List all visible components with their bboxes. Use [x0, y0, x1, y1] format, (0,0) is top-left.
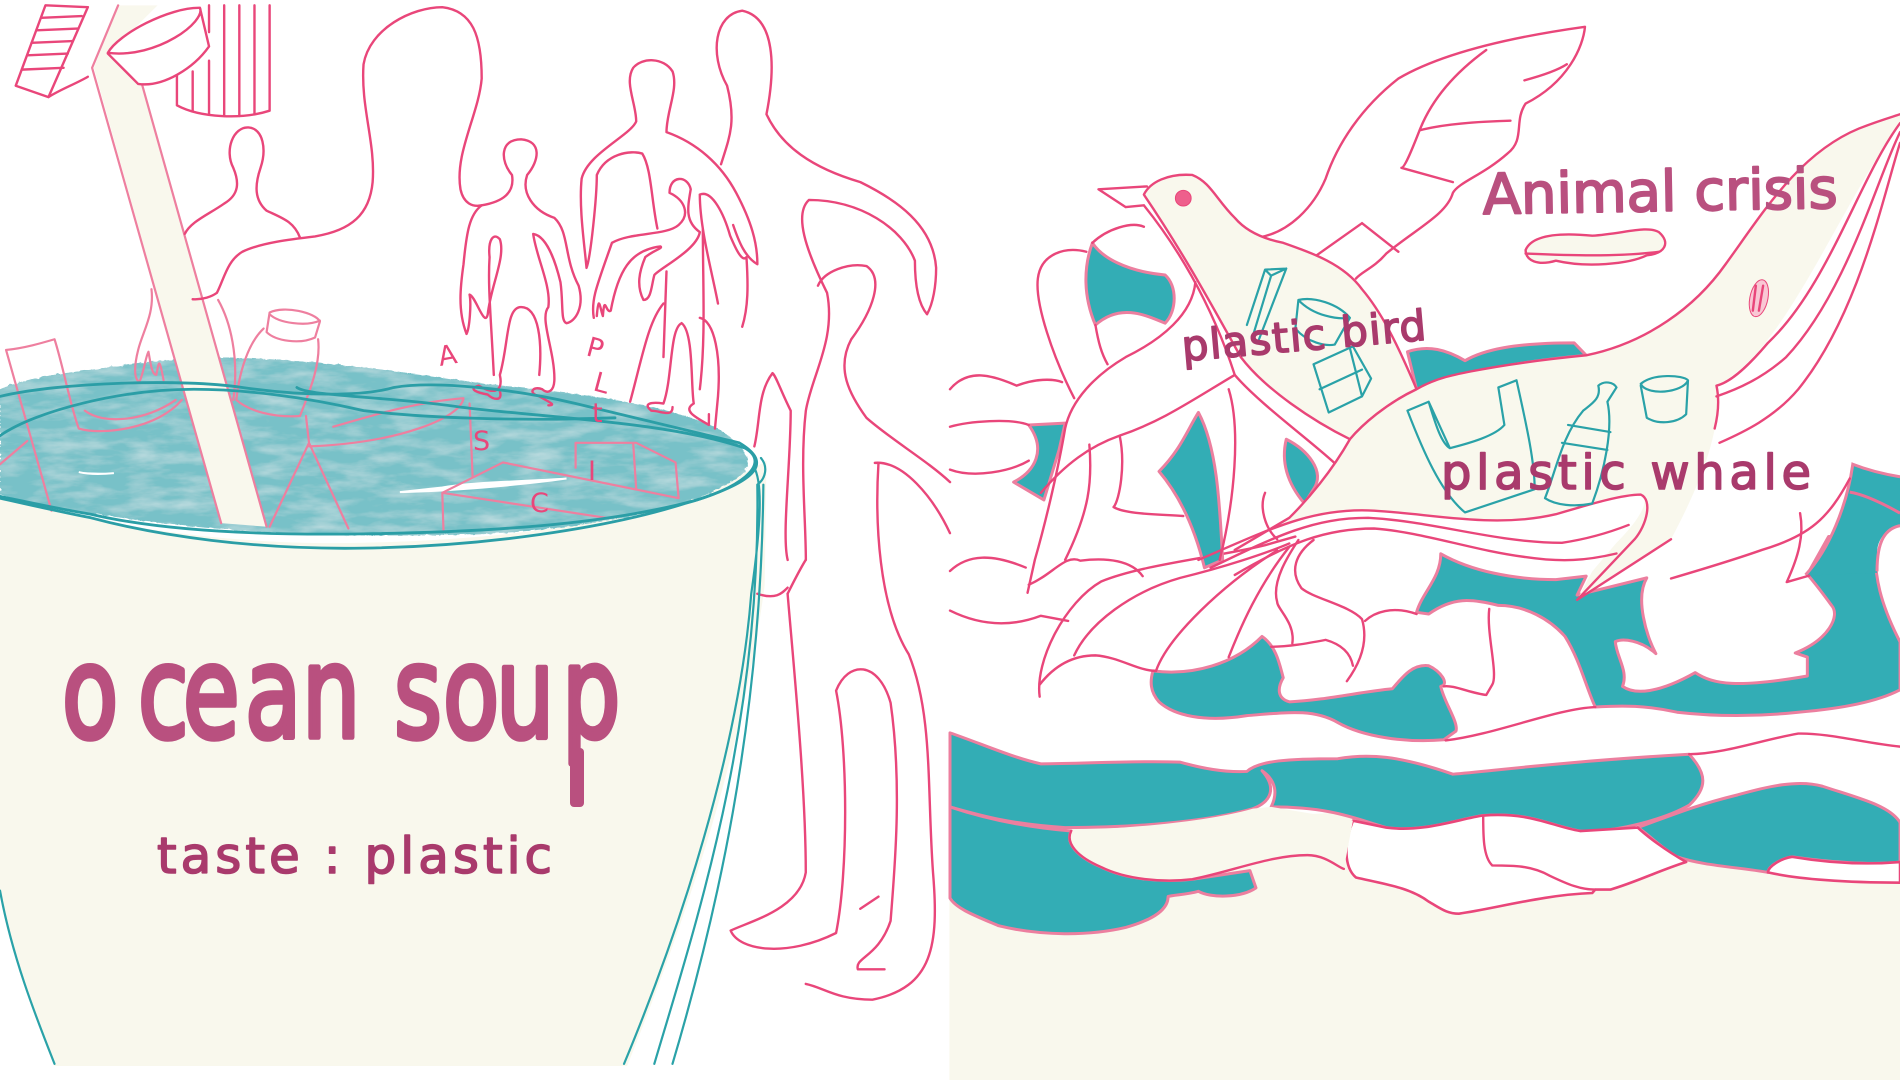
cup in water [0, 339, 182, 511]
teal right wave [1638, 783, 1900, 872]
white foam right [1768, 857, 1900, 883]
bird body [1098, 175, 1417, 466]
cream wave [1070, 807, 1353, 880]
whale tail fan [1039, 537, 1494, 697]
plastic letters: L [590, 367, 613, 401]
label: plastic whale: plastic whale [1441, 445, 1811, 501]
tall figure left leg [754, 373, 791, 560]
teal left sea [1151, 636, 1456, 741]
pink crease in right patch [1850, 492, 1900, 513]
adult figure [581, 60, 757, 268]
straw [92, 5, 267, 527]
tall figure [717, 11, 936, 560]
subheading: taste plastic: taste : plastic [157, 827, 552, 885]
bird upper wing [1259, 27, 1585, 279]
figure arm in water [135, 289, 235, 400]
upper wave line [1689, 734, 1900, 754]
middle child figure [593, 179, 709, 425]
plastic letters: I [588, 456, 596, 487]
teal patch wing gap [1159, 412, 1223, 568]
soup rim lines [0, 383, 757, 548]
large figure silhouette [193, 7, 482, 299]
left cloud lines [950, 558, 1143, 623]
plastic letters: P [583, 332, 607, 366]
teal patch belly [1284, 439, 1317, 504]
teal patch right edges [1806, 464, 1900, 575]
soup bowl body [0, 461, 766, 1066]
heading: animal crisis: Animal crisis [1482, 157, 1838, 228]
whale body [1277, 114, 1900, 600]
whale eye [1747, 279, 1771, 317]
bird eye [1175, 190, 1191, 206]
adult figure lower body [630, 194, 748, 429]
panel: animal crisis [949, 27, 1900, 1080]
plastic items in bird [1247, 269, 1371, 412]
lower figure legs [0, 458, 950, 1064]
teal lower left wave [950, 807, 1256, 934]
plastic letters: t [592, 398, 603, 429]
heading: ocean soup: ocean soup [62, 620, 620, 768]
whale outline [1198, 114, 1900, 600]
child figure [460, 139, 581, 405]
plastic letters [436, 332, 613, 519]
teal patch left [1014, 423, 1065, 500]
oval shape under heading [1526, 229, 1665, 264]
teal patch right [1806, 464, 1900, 576]
bird lower wing [1028, 282, 1277, 593]
teal sea band [950, 733, 1703, 831]
water highlights [79, 472, 567, 492]
bottle cap [108, 7, 209, 85]
left leaves and clouds [950, 225, 1144, 474]
teal patch under bird [1407, 343, 1586, 389]
hatched box [16, 5, 88, 97]
panel: ocean soup [0, 5, 950, 1066]
white foam lower [1346, 815, 1686, 914]
plastic bag and box lines in water [270, 398, 473, 529]
cream sea floor [949, 812, 1900, 1080]
connecting wave line [1446, 707, 1595, 740]
plastic items in whale [1407, 376, 1688, 512]
central teal sea [1417, 537, 1900, 715]
glass jar [236, 310, 320, 416]
ribbed cylinder [177, 5, 270, 116]
plastic letters: C [530, 488, 549, 519]
small figure [185, 127, 300, 237]
teal patch behind bird [1086, 243, 1174, 325]
label: plastic bird: plastic bird [1180, 301, 1428, 371]
plastic letters: A [436, 339, 460, 373]
plastic letters: S [473, 426, 490, 457]
soup water surface [0, 358, 748, 536]
inner figure [818, 265, 950, 482]
